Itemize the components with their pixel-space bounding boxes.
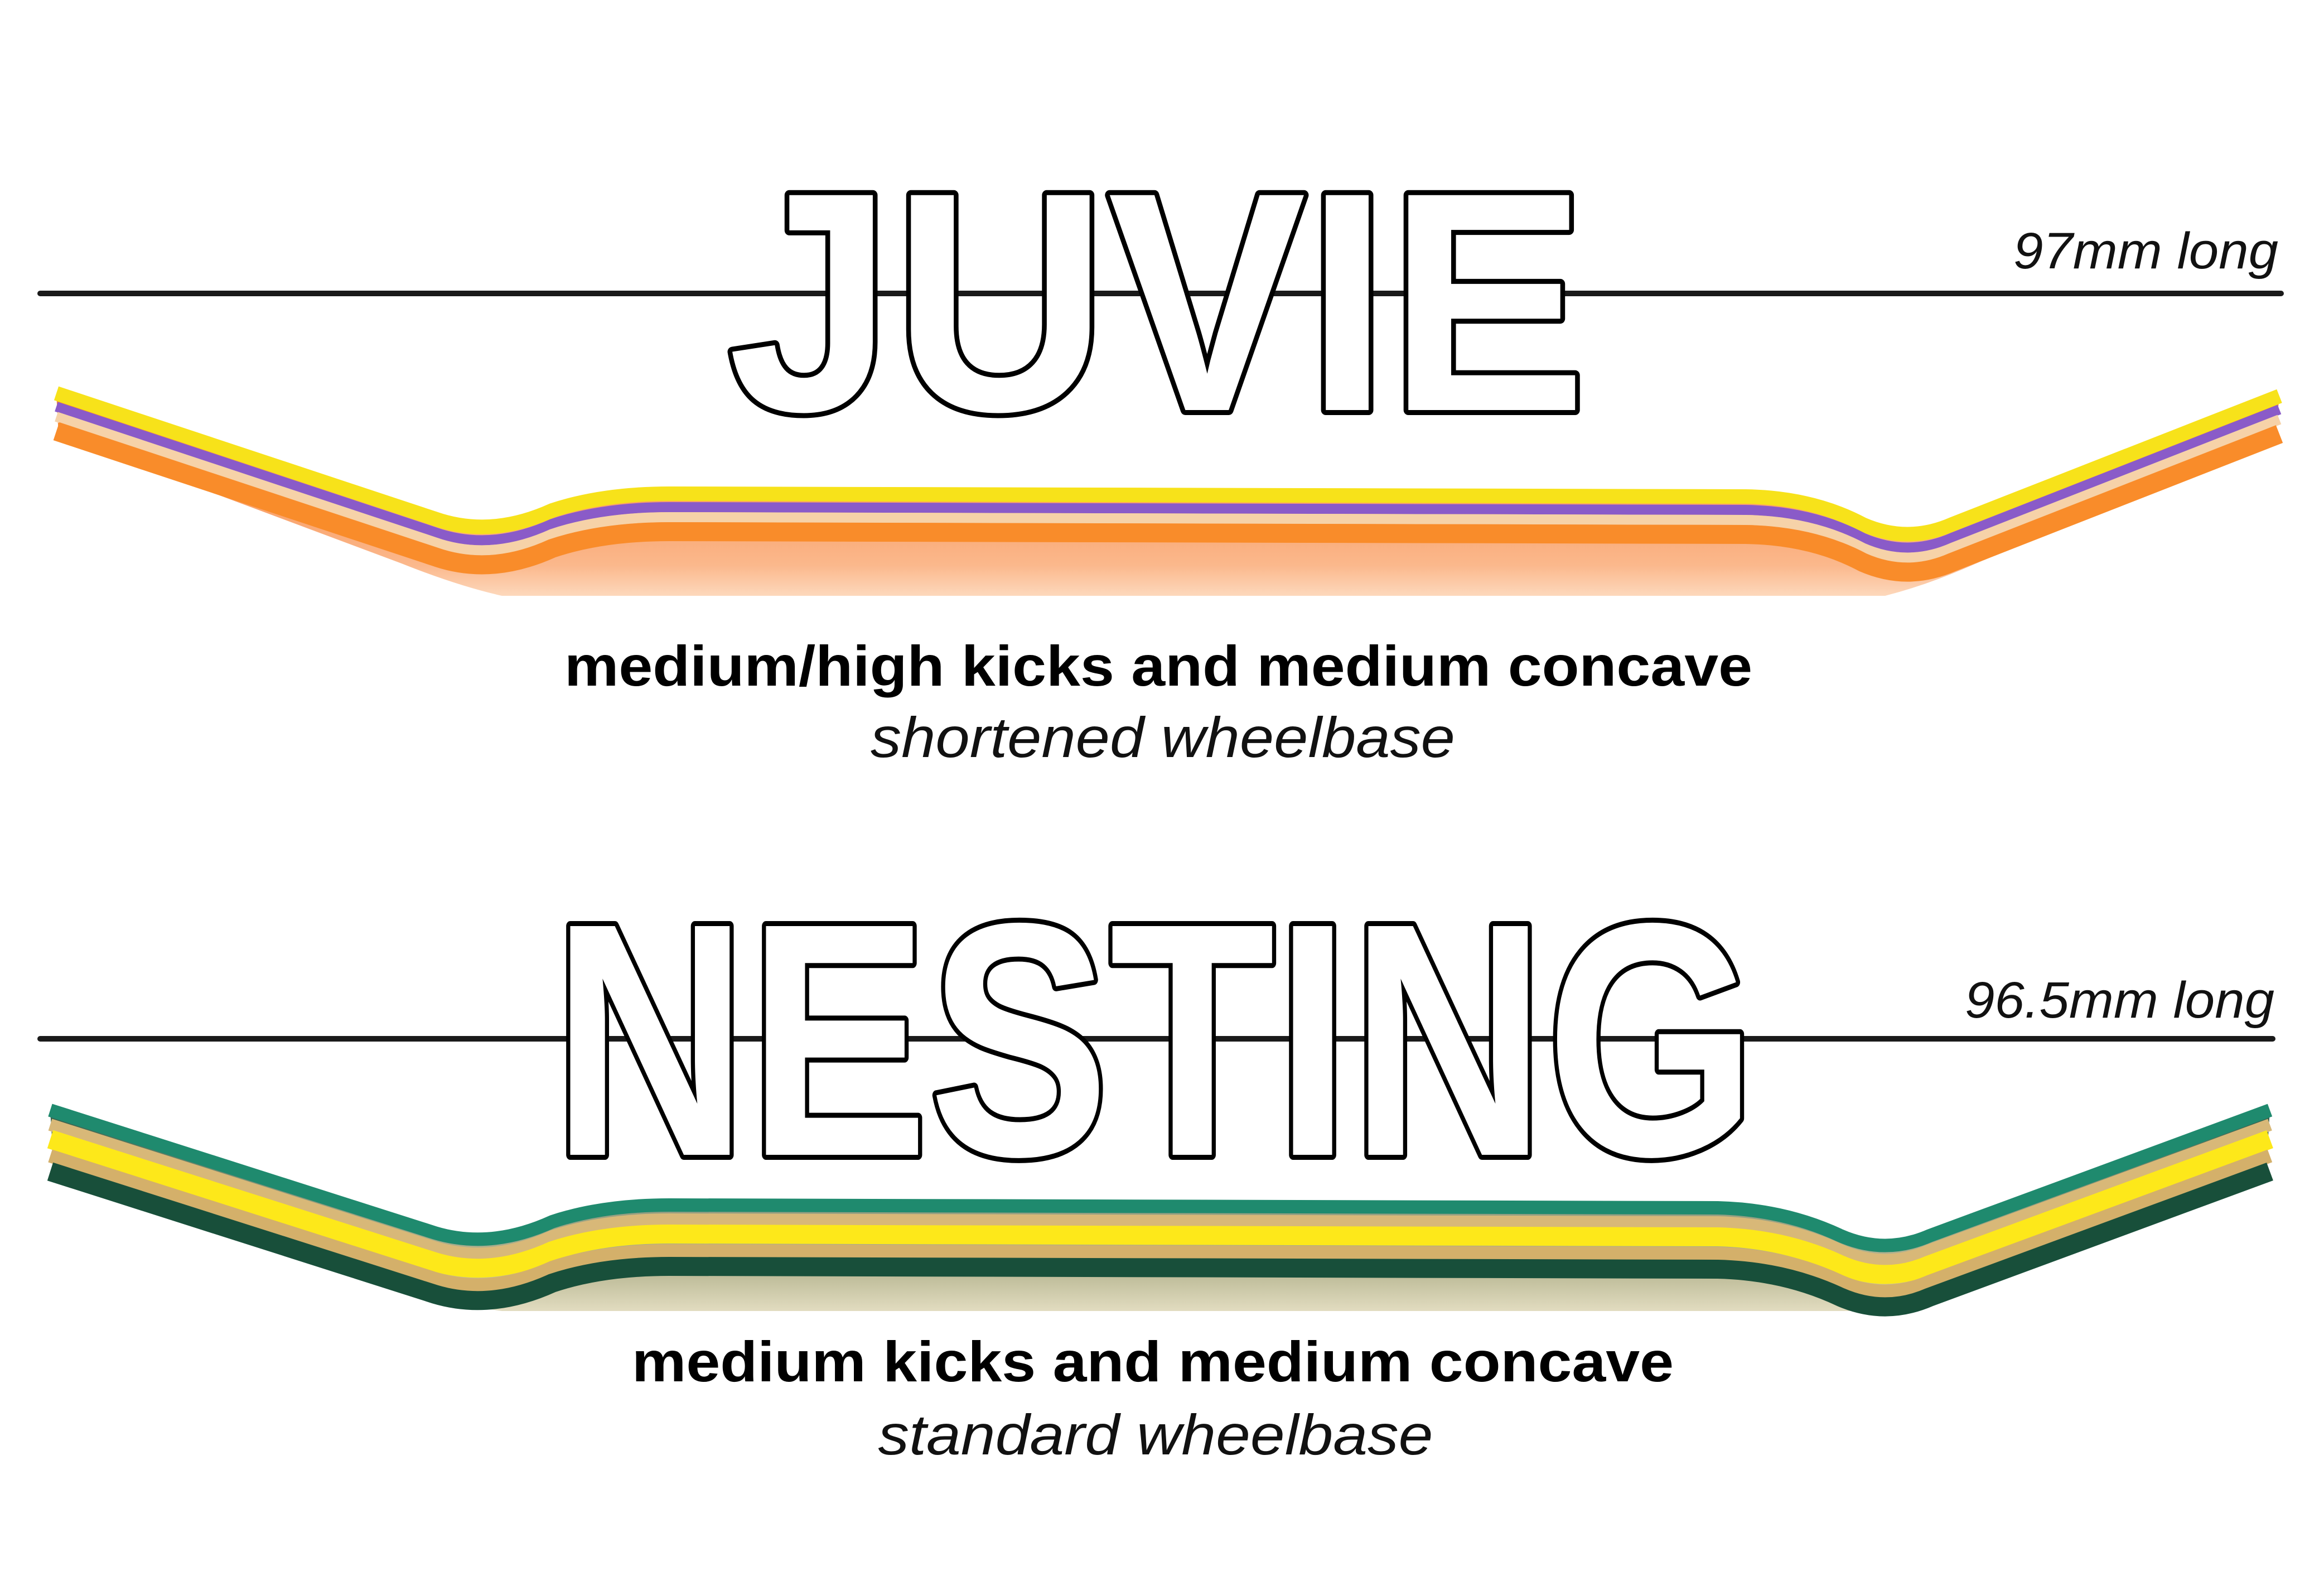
text: 96.5mm long: 96.5mm long bbox=[1965, 972, 2274, 1029]
text: 97mm long: 97mm long bbox=[2013, 223, 2278, 279]
deck: juvie profile bbox=[56, 393, 2279, 596]
text: juvie description: medium/high kicks and medium concave bbox=[564, 634, 1752, 698]
text: shortened wheelbase: shortened wheelbase bbox=[871, 706, 1455, 769]
line: juvie length bbox=[40, 291, 2281, 296]
line: nesting length bbox=[40, 1036, 2273, 1042]
text: nesting description: medium kicks and medium concave bbox=[632, 1330, 1674, 1394]
panel: nesting bbox=[40, 854, 2274, 1467]
title: JUVIE: JUVIE bbox=[728, 127, 1587, 476]
text: standard wheelbase: standard wheelbase bbox=[878, 1403, 1433, 1467]
deck: nesting profile bbox=[50, 1110, 2270, 1311]
panel: juvie bbox=[40, 127, 2281, 769]
title: NESTING: NESTING bbox=[552, 854, 1757, 1226]
